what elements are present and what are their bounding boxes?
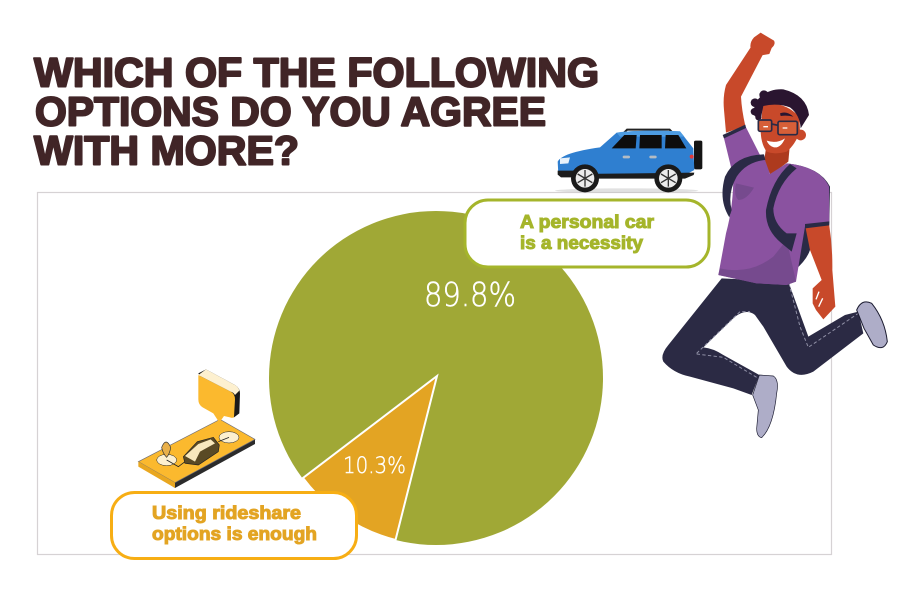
callout: personal car: is a necessity xyxy=(520,233,643,253)
pie slice: personal car 89.8% xyxy=(269,211,603,545)
trousers xyxy=(662,278,863,395)
eyebrow xyxy=(780,113,793,117)
callout: personal car xyxy=(465,200,709,267)
sleeve cuffs xyxy=(723,125,829,228)
shirt xyxy=(718,126,829,285)
shirt shading xyxy=(718,240,796,285)
title: WITH MORE? xyxy=(34,128,299,174)
icon: phone with car and speech bubble xyxy=(138,369,255,488)
eye highlights xyxy=(763,126,787,129)
label: 89.8%: 89.8% xyxy=(424,275,516,314)
callout: rideshare: Using rideshare xyxy=(152,503,301,523)
title: WHICH OF THE FOLLOWING xyxy=(34,50,599,96)
callout: personal car: A personal car xyxy=(520,212,654,232)
shirt pocket xyxy=(735,183,754,200)
callout: rideshare xyxy=(112,492,356,558)
shoe: right xyxy=(857,302,887,348)
glasses xyxy=(758,120,797,135)
title xyxy=(34,50,599,174)
icon: blue car xyxy=(555,129,702,193)
pie chart xyxy=(269,211,603,545)
label: 10.3%: 10.3% xyxy=(343,454,406,479)
hair xyxy=(751,89,809,128)
finger gaps xyxy=(816,292,823,307)
fist xyxy=(750,33,775,56)
illustration: jumping man xyxy=(662,33,887,438)
face xyxy=(761,104,800,153)
title: OPTIONS DO YOU AGREE xyxy=(35,88,546,134)
neck xyxy=(764,143,790,175)
ear xyxy=(795,130,806,140)
pie slice: rideshare 10.3% xyxy=(303,376,437,540)
backpack xyxy=(767,163,830,270)
mouth xyxy=(767,138,785,147)
raised arm xyxy=(724,47,763,133)
trouser stitching xyxy=(697,283,858,378)
callout: rideshare: options is enough xyxy=(152,524,317,544)
lowered arm xyxy=(805,223,835,319)
straps xyxy=(722,154,797,252)
shoe: left xyxy=(753,375,777,438)
chart frame xyxy=(38,192,832,554)
